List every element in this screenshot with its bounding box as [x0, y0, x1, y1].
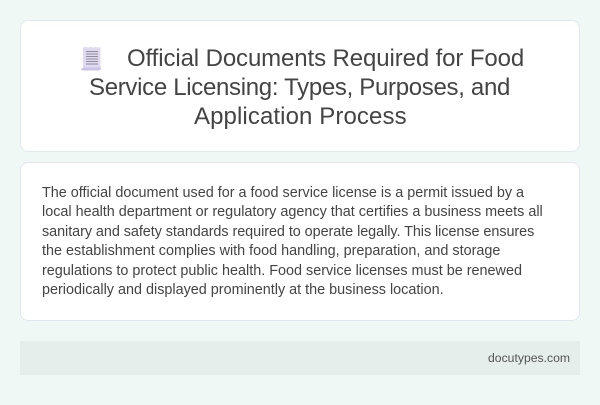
text block: description: sanitary and safety standards required to operate legally. This license ensures [42, 224, 534, 240]
title: Application Process [194, 103, 407, 130]
panel: title card [20, 20, 580, 152]
footer source text: docutypes.com [488, 351, 570, 365]
icon: document [81, 47, 101, 70]
text block: description [42, 185, 543, 298]
text block: description: the establishment complies with food handling, preparation, and storage [42, 243, 500, 259]
text block: description: The official document used for a food service license is a permit issued by a [42, 185, 524, 201]
text block: description: local health department or regulatory agency that certifies a business meets all [42, 204, 543, 220]
title [89, 45, 524, 130]
text block: description: regulations to protect public health. Food service licenses must be renewed [42, 263, 522, 279]
panel: description card [20, 162, 580, 321]
text block: description: periodically and displayed prominently at the business location. [42, 282, 444, 298]
footer bar [20, 341, 580, 375]
title: Service Licensing: Types, Purposes, and [89, 74, 510, 101]
title: Official Documents Required for Food [127, 45, 524, 72]
